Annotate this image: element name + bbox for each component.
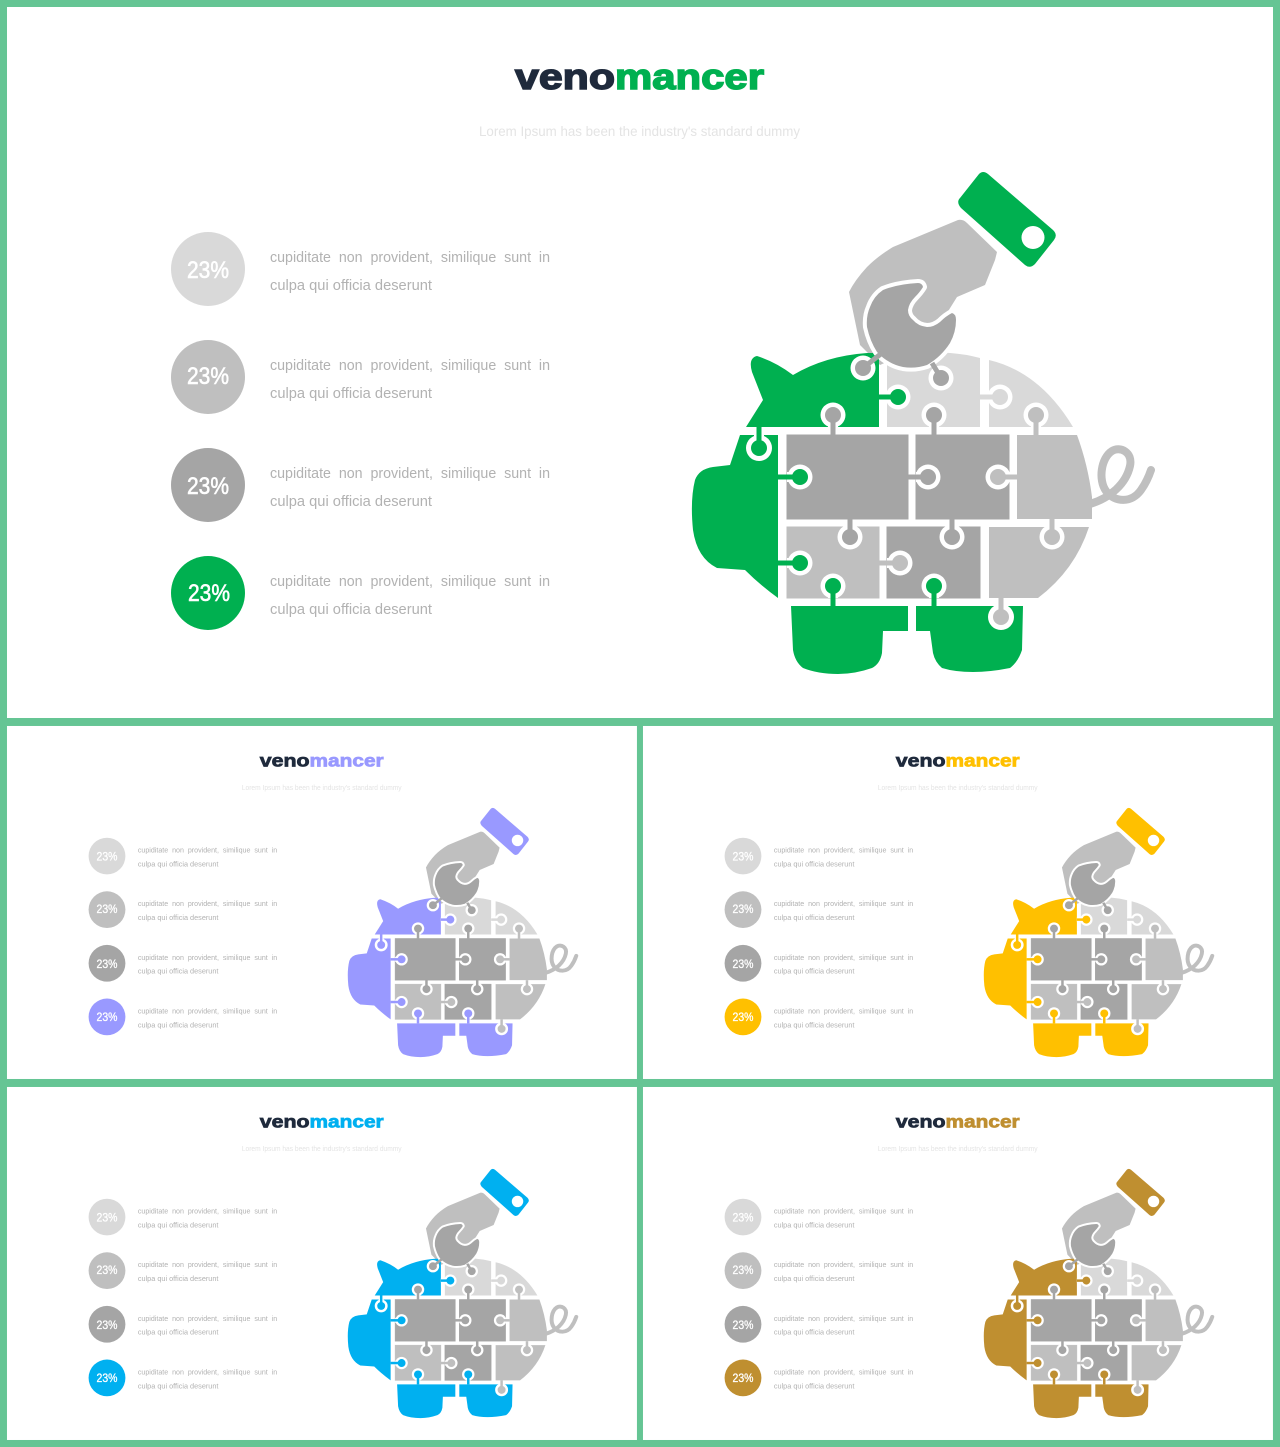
puzzle piece: left foot	[791, 606, 908, 674]
list item 3: 23%	[187, 473, 229, 500]
list item 2: culpa qui officia deserunt	[270, 386, 432, 402]
puzzle piece: top middle	[887, 352, 980, 427]
title	[515, 56, 764, 97]
title: mancer	[310, 1112, 384, 1132]
list item 3: culpa qui officia deserunt	[270, 494, 432, 510]
list item 3: cupiditate non provident, similique sunt in	[774, 1314, 913, 1323]
list item 2: 23%	[97, 1263, 118, 1277]
title: mancer	[310, 751, 384, 771]
list item 2	[725, 891, 913, 928]
list item 1: culpa qui officia deserunt	[138, 859, 218, 868]
list item 4: 23%	[97, 1371, 118, 1385]
title	[896, 1112, 1020, 1132]
list item 2: culpa qui officia deserunt	[138, 1274, 218, 1283]
subtitle: Lorem Ipsum has been the industry's standard dummy	[878, 785, 1038, 792]
list item 1: culpa qui officia deserunt	[774, 1220, 854, 1229]
icon: hand	[849, 220, 997, 365]
panel: main green slide	[7, 7, 1273, 718]
title	[896, 751, 1020, 771]
list item 2: cupiditate non provident, similique sunt in	[774, 899, 913, 908]
list item 4: cupiditate non provident, similique sunt in	[774, 1367, 913, 1376]
list item 1: cupiditate non provident, similique sunt in	[138, 846, 277, 855]
list item 4: 23%	[733, 1010, 754, 1024]
list item 3: culpa qui officia deserunt	[774, 967, 854, 976]
list item 4	[89, 1360, 277, 1396]
puzzle piece: green head and back	[746, 353, 879, 427]
list item 1	[725, 838, 913, 874]
list item 1: cupiditate non provident, similique sunt in	[138, 1207, 277, 1216]
list item 2: 23%	[187, 363, 229, 390]
puzzle piece: lower right	[989, 527, 1089, 598]
list item 2: cupiditate non provident, similique sunt in	[138, 1260, 277, 1269]
list item 4: cupiditate non provident, similique sunt in	[138, 1367, 277, 1376]
list item 1	[89, 1199, 277, 1235]
list item 4: culpa qui officia deserunt	[138, 1381, 218, 1390]
list item 4	[725, 1360, 913, 1396]
title: mancer	[946, 751, 1020, 771]
list item 1: culpa qui officia deserunt	[270, 278, 432, 294]
panel: gold slide	[643, 1087, 1273, 1440]
list item 4: 23%	[97, 1010, 118, 1024]
icon: pig tail	[1090, 449, 1151, 504]
list item 3	[89, 945, 277, 982]
title: veno	[260, 751, 310, 771]
list item 3: cupiditate non provident, similique sunt in	[774, 953, 913, 962]
list item 2: cupiditate non provident, similique sunt in	[774, 1260, 913, 1269]
list item 3: culpa qui officia deserunt	[138, 967, 218, 976]
list item 4: culpa qui officia deserunt	[270, 602, 432, 618]
list item 1	[725, 1199, 913, 1235]
puzzle piece: right foot	[916, 606, 1023, 672]
title: veno	[896, 1112, 946, 1132]
list item 4: cupiditate non provident, similique sunt in	[270, 574, 550, 590]
list item 4: 23%	[733, 1371, 754, 1385]
list item 3: cupiditate non provident, similique sunt in	[138, 1314, 277, 1323]
title	[260, 1112, 384, 1132]
title	[260, 751, 384, 771]
list item 1: 23%	[187, 257, 229, 284]
list item 2: culpa qui officia deserunt	[138, 913, 218, 922]
list item 1: cupiditate non provident, similique sunt in	[774, 1207, 913, 1216]
list item 1: 23%	[97, 850, 118, 864]
list item 2: 23%	[733, 1263, 754, 1277]
icon: puzzle piggy bank with hand	[692, 172, 1151, 674]
list item 2	[89, 891, 277, 928]
list item 2: culpa qui officia deserunt	[774, 913, 854, 922]
puzzle piece: green snout	[692, 435, 778, 598]
subtitle: Lorem Ipsum has been the industry's standard dummy	[242, 785, 402, 792]
puzzle piece: lower left	[787, 527, 879, 598]
puzzle connectors	[746, 384, 1064, 630]
puzzle piece: middle right	[1017, 435, 1092, 519]
list item 2	[725, 1252, 913, 1289]
list item 3: 23%	[733, 957, 754, 971]
list item 3: 23%	[97, 1318, 118, 1332]
list item 1: culpa qui officia deserunt	[138, 1220, 218, 1229]
list item 3	[725, 945, 913, 982]
list item 3: cupiditate non provident, similique sunt in	[270, 466, 550, 482]
list item 1: cupiditate non provident, similique sunt in	[774, 846, 913, 855]
list item 4: cupiditate non provident, similique sunt in	[774, 1006, 913, 1015]
puzzle piece: top right	[989, 360, 1073, 427]
puzzle piece: held in hand	[850, 283, 956, 390]
title: veno	[515, 56, 615, 97]
list item 1: 23%	[733, 850, 754, 864]
icon: puzzle piggy bank with hand	[984, 1169, 1212, 1418]
icon: puzzle piggy bank with hand	[984, 808, 1212, 1057]
list item 3	[725, 1306, 913, 1343]
icon: puzzle piggy bank with hand	[348, 808, 576, 1057]
list item 4: culpa qui officia deserunt	[774, 1020, 854, 1029]
list item 2: 23%	[733, 902, 754, 916]
title: mancer	[946, 1112, 1020, 1132]
title: veno	[260, 1112, 310, 1132]
panel: blue slide	[7, 1087, 637, 1440]
list item 3	[89, 1306, 277, 1343]
subtitle: Lorem Ipsum has been the industry's standard dummy	[479, 123, 800, 139]
list item 2: cupiditate non provident, similique sunt in	[270, 358, 550, 374]
list item 4	[171, 556, 550, 630]
puzzle piece: middle centre	[916, 435, 1009, 519]
list item 4	[725, 999, 913, 1035]
panel: purple slide	[7, 726, 637, 1079]
list item 1: cupiditate non provident, similique sunt in	[270, 250, 550, 266]
list item 1	[89, 838, 277, 874]
puzzle piece: lower centre	[887, 527, 980, 598]
puzzle piece: middle left	[787, 435, 908, 519]
icon: puzzle piggy bank with hand	[348, 1169, 576, 1418]
list item 2	[89, 1252, 277, 1289]
list item 4: cupiditate non provident, similique sunt in	[138, 1006, 277, 1015]
list item 1: culpa qui officia deserunt	[774, 859, 854, 868]
list item 4	[89, 999, 277, 1035]
list item 3: culpa qui officia deserunt	[774, 1328, 854, 1337]
list item 1: 23%	[97, 1211, 118, 1225]
list item 3	[171, 448, 550, 522]
list item 3: 23%	[97, 957, 118, 971]
list item 2: cupiditate non provident, similique sunt in	[138, 899, 277, 908]
subtitle: Lorem Ipsum has been the industry's standard dummy	[878, 1146, 1038, 1153]
title: veno	[896, 751, 946, 771]
list item 1	[171, 232, 550, 306]
list item 4: 23%	[188, 580, 230, 607]
subtitle: Lorem Ipsum has been the industry's standard dummy	[242, 1146, 402, 1153]
panel: yellow slide	[643, 726, 1273, 1079]
list item 3: 23%	[733, 1318, 754, 1332]
list item 3: cupiditate non provident, similique sunt in	[138, 953, 277, 962]
list item 1: 23%	[733, 1211, 754, 1225]
list item 4: culpa qui officia deserunt	[138, 1020, 218, 1029]
list item 4: culpa qui officia deserunt	[774, 1381, 854, 1390]
list item 2	[171, 340, 550, 414]
title: mancer	[615, 56, 764, 97]
list item 2: 23%	[97, 902, 118, 916]
list item 2: culpa qui officia deserunt	[774, 1274, 854, 1283]
icon: cuff	[958, 172, 1056, 267]
list item 3: culpa qui officia deserunt	[138, 1328, 218, 1337]
